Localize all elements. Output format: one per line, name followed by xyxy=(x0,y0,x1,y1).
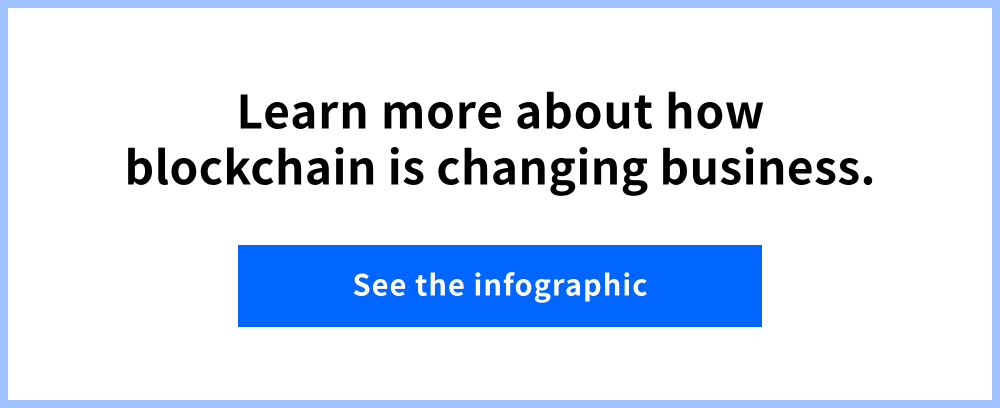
heading: Learn more about how xyxy=(236,76,764,142)
heading xyxy=(124,76,876,198)
button: see the infographic: See the infographic xyxy=(352,262,648,304)
heading: blockchain is changing business. xyxy=(124,132,876,198)
button: see the infographic xyxy=(238,245,762,327)
